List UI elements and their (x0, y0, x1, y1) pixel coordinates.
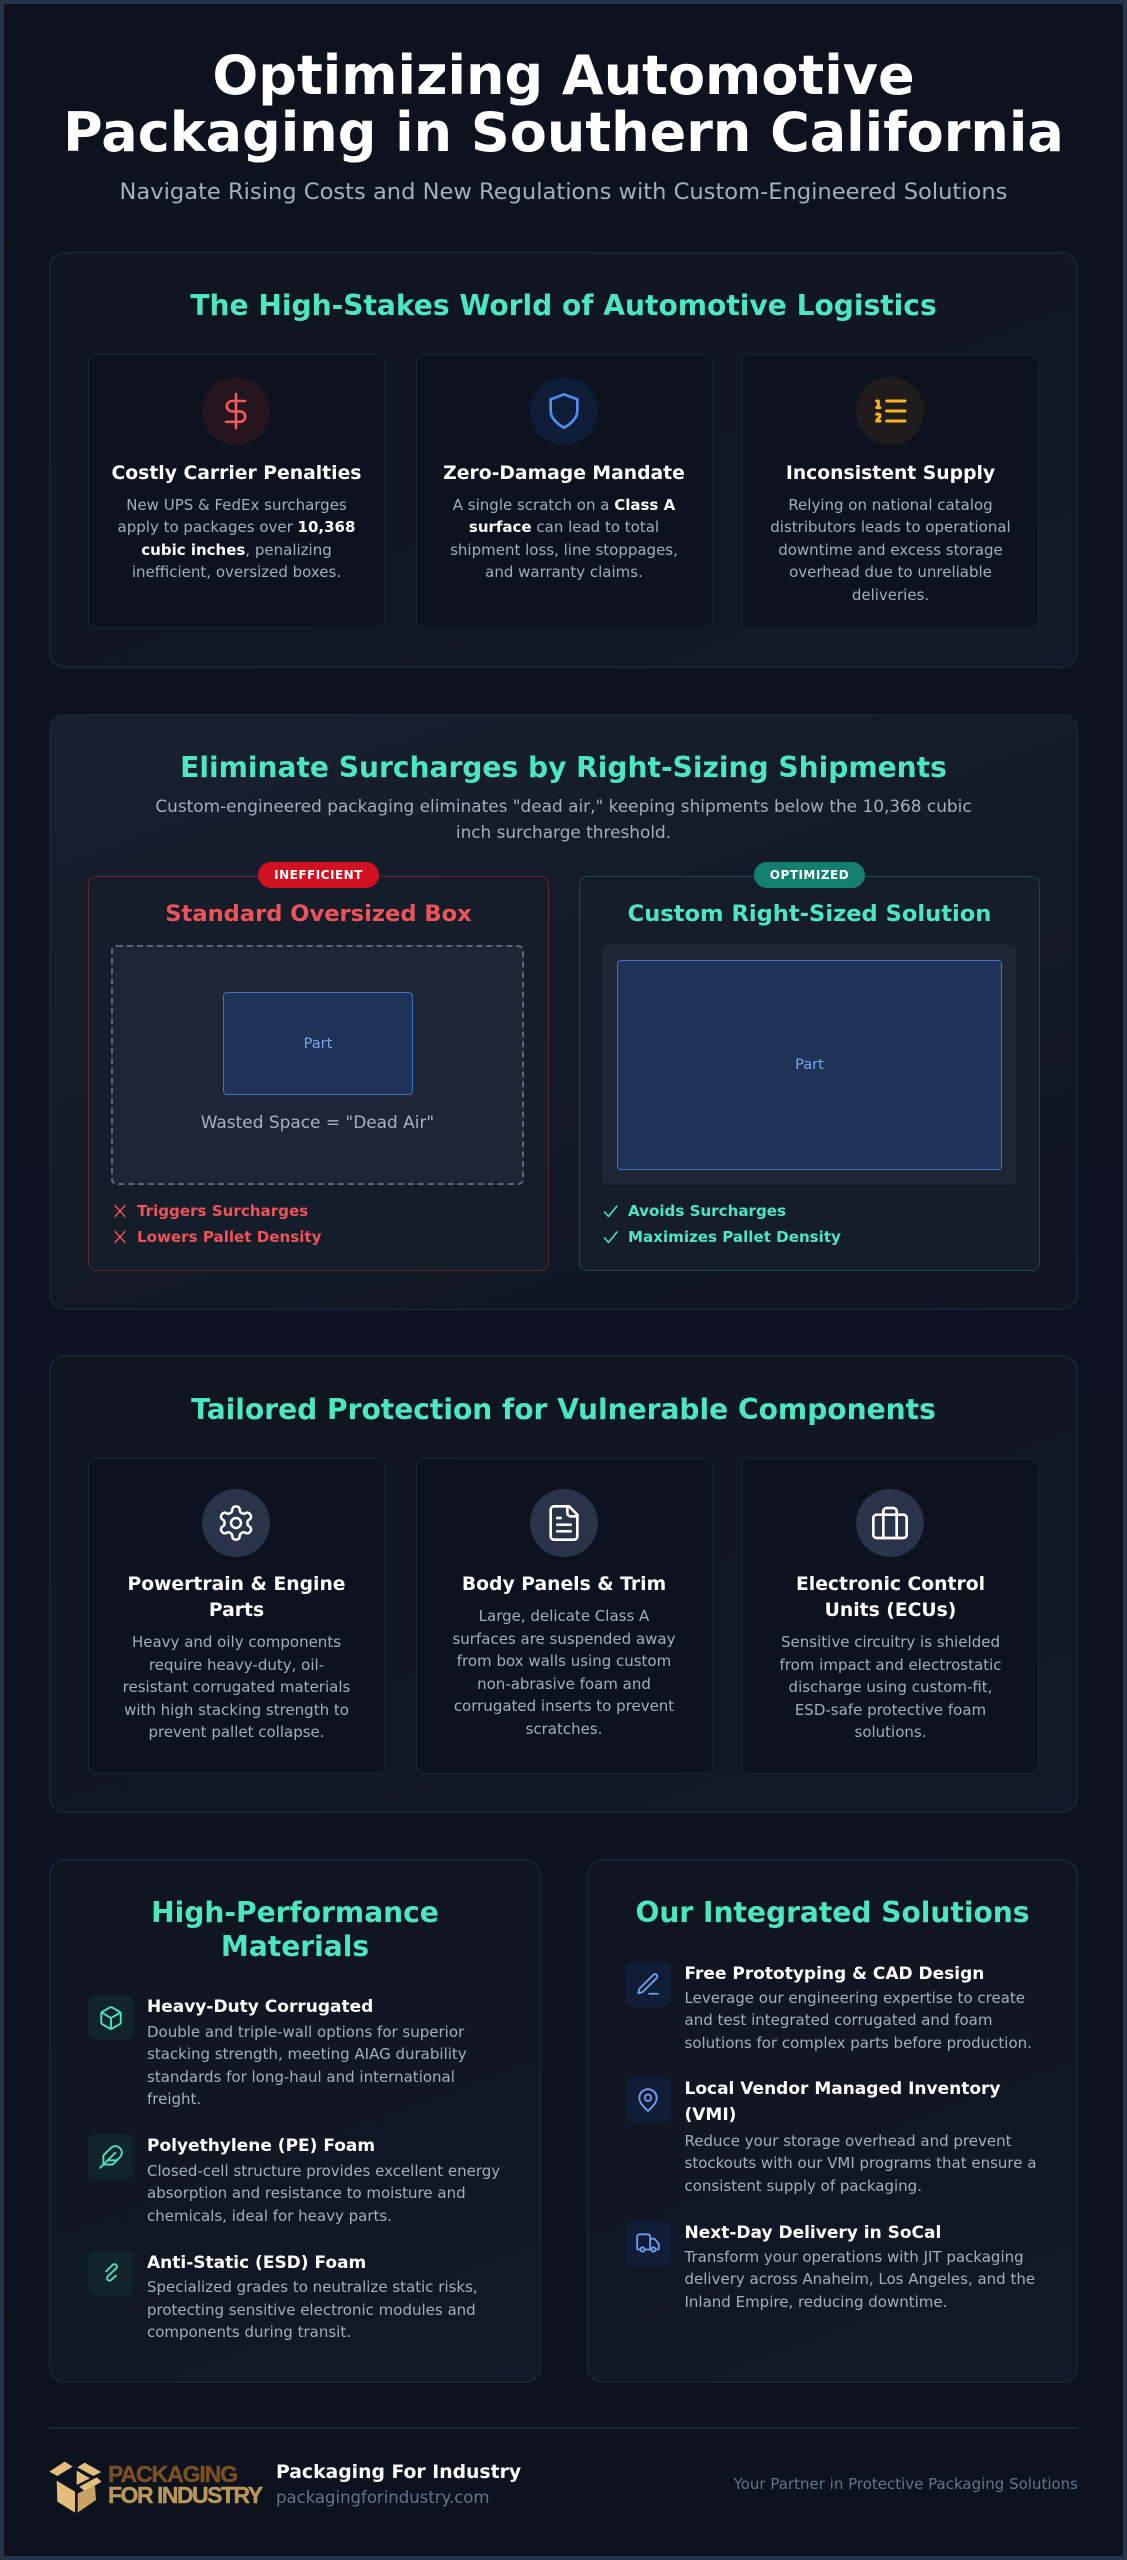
card text: apply to packages over 10,368 (118, 518, 355, 536)
card text: solutions. (854, 1723, 926, 1741)
badge: inefficient: INEFFICIENT (274, 868, 363, 882)
heading: protection: Tailored Protection for Vulnerable Components (191, 1393, 936, 1426)
item text: solutions for complex parts before production. (684, 2034, 1032, 2052)
item text: absorption and resistance to moisture and (147, 2184, 466, 2202)
heading: materials: High-Performance (151, 1896, 439, 1928)
card title: Powertrain & Engine (127, 1574, 346, 1595)
card text (118, 496, 355, 581)
panel: tailored protection (49, 1355, 1078, 1813)
icon: briefcase (856, 1489, 924, 1557)
card text: cubic inches, penalizing (141, 541, 332, 559)
card title: Parts (209, 1600, 264, 1621)
icon: map pin (626, 2077, 670, 2122)
heading: materials: Materials (221, 1930, 369, 1962)
card: costly carrier penalties (88, 354, 385, 629)
card text (123, 1633, 350, 1741)
item title (684, 2079, 1000, 2125)
item text: Leverage our engineering expertise to create (684, 1988, 1025, 2006)
footer company name: Packaging For Industry (276, 2462, 521, 2483)
title (63, 44, 1064, 164)
item text: freight. (147, 2090, 201, 2108)
item text (684, 1988, 1032, 2052)
material: corrugated (88, 1995, 467, 2108)
item text: Reduce your storage overhead and prevent (684, 2132, 1011, 2150)
item title: Free Prototyping & CAD Design (684, 1964, 984, 1984)
item text (147, 2162, 500, 2224)
card text: non-abrasive foam and (477, 1674, 651, 1692)
panel: high-stakes world (49, 252, 1078, 668)
icon: pen (626, 1962, 670, 2006)
item text (684, 2248, 1035, 2310)
item text: Closed-cell structure provides excellent energy (147, 2162, 500, 2180)
item text: stacking strength, meeting AIAG durability (147, 2045, 467, 2063)
item text: and test integrated corrugated and foam (684, 2011, 992, 2029)
list item: maximizes pallet density: Maximizes Pallet Density (628, 1228, 841, 1246)
card text (452, 1607, 676, 1738)
subtitle: Navigate Rising Costs and New Regulations with Custom-Engineered Solutions (120, 179, 1007, 205)
item text (147, 2022, 467, 2108)
card text: surfaces are suspended away (452, 1630, 676, 1648)
part: Part (795, 1056, 824, 1073)
card text (450, 496, 678, 581)
card text: Heavy and oily components (132, 1633, 341, 1651)
heading: surcharges: Eliminate Surcharges by Right-Sizing Shipments (180, 751, 947, 784)
item text: delivery across Anaheim, Los Angeles, and the (684, 2270, 1035, 2288)
logo (49, 2461, 263, 2513)
item text: Double and triple-wall options for superior (147, 2022, 464, 2040)
part (223, 992, 413, 1095)
item text: stockouts with our VMI programs that ensure a (684, 2154, 1036, 2172)
card: zero-damage mandate (416, 354, 712, 629)
heading: materials (151, 1896, 439, 1962)
diagram: right-sized box (602, 945, 1016, 1185)
card text: Relying on national catalog (788, 496, 993, 514)
section description: Custom-engineered packaging eliminates "dead air," keeping shipments below the 10,368 cubic (155, 796, 972, 816)
card text: with high stacking strength to (124, 1700, 349, 1718)
card text: and warranty claims. (485, 563, 643, 581)
icon: feather (88, 2134, 133, 2179)
logo wordmark: FOR INDUSTRY (108, 2482, 262, 2508)
card text: A single scratch on a Class A (453, 496, 675, 514)
card text: resistant corrugated materials (123, 1678, 350, 1696)
comparison card: right-sized solution (579, 876, 1040, 1271)
icon: link squiggle (88, 2250, 133, 2296)
part: Part (304, 1035, 332, 1052)
item title: Next-Day Delivery in SoCal (684, 2222, 941, 2242)
card: electronic control units (742, 1458, 1039, 1774)
panel: materials (49, 1859, 541, 2383)
footer url: packagingforindustry.com (276, 2488, 489, 2507)
title: Packaging in Southern California (63, 101, 1064, 164)
card text (779, 1633, 1002, 1741)
card text: from box walls using custom (457, 1652, 671, 1670)
item title: Heavy-Duty Corrugated (147, 1997, 373, 2017)
icon: shield (530, 377, 598, 445)
card text: shipment loss, line stoppages, (450, 541, 678, 559)
item text: standards for long-haul and international (147, 2068, 455, 2086)
solution: prototyping (626, 1962, 1032, 2052)
section description: inch surcharge threshold. (456, 822, 671, 842)
item title: Local Vendor Managed Inventory (684, 2079, 1000, 2099)
card: body panels (416, 1458, 712, 1774)
item text: consistent supply of packaging. (684, 2176, 922, 2194)
material: PE foam (88, 2134, 500, 2224)
diagram: box with dead air (111, 945, 524, 1185)
item text: chemicals, ideal for heavy parts. (147, 2206, 392, 2224)
card title: Electronic Control (796, 1574, 985, 1595)
logo wordmark (108, 2461, 263, 2508)
item text: Transform your operations with JIT packaging (684, 2248, 1024, 2266)
icon: box (88, 1995, 133, 2040)
material: ESD foam (88, 2251, 478, 2341)
list item: triggers surcharges: Triggers Surcharges (137, 1202, 308, 1220)
badge: optimized: OPTIMIZED (770, 868, 849, 882)
card text: corrugated inserts to prevent (454, 1697, 674, 1715)
card text: Sensitive circuitry is shielded (781, 1633, 1000, 1651)
item title: Anti-Static (ESD) Foam (147, 2252, 366, 2272)
card text: New UPS & FedEx surcharges (126, 496, 347, 514)
card text: scratches. (526, 1720, 602, 1738)
icon: truck (626, 2220, 670, 2266)
card text: downtime and excess storage (778, 541, 1003, 559)
card title: Costly Carrier Penalties (112, 462, 361, 484)
card text: discharge using custom-fit, (789, 1678, 992, 1696)
item text (147, 2278, 478, 2341)
comparison title: Standard Oversized Box (165, 901, 472, 927)
item text (684, 2132, 1036, 2194)
panel: eliminate surcharges (49, 714, 1078, 1310)
card text: distributors leads to operational (770, 518, 1011, 536)
panel: integrated solutions (587, 1859, 1078, 2383)
icon: dollar sign (202, 377, 270, 445)
item text: Inland Empire, reducing downtime. (684, 2292, 947, 2310)
card title: Inconsistent Supply (786, 462, 995, 484)
comparison card: oversized box (88, 876, 549, 1271)
card text: ESD-safe protective foam (795, 1700, 986, 1718)
card: inconsistent supply (742, 354, 1039, 629)
card text: deliveries. (852, 586, 929, 604)
card title (127, 1574, 346, 1621)
card title: Body Panels & Trim (462, 1574, 666, 1595)
badge: optimized (754, 862, 865, 888)
card text: overhead due to unreliable (789, 563, 992, 581)
icon: gear (202, 1489, 270, 1557)
list item: avoids surcharges: Avoids Surcharges (628, 1202, 786, 1220)
card text: inefficient, oversized boxes. (132, 563, 341, 581)
heading: solutions: Our Integrated Solutions (636, 1896, 1030, 1928)
item text: components during transit. (147, 2323, 351, 2341)
title: Optimizing Automotive (212, 44, 915, 107)
heading: high-stakes: The High-Stakes World of Automotive Logistics (190, 289, 937, 322)
icon: document (530, 1489, 598, 1557)
solution: VMI (626, 2077, 1036, 2194)
item text: protecting sensitive electronic modules and (147, 2300, 476, 2318)
comparison title: Custom Right-Sized Solution (628, 901, 991, 927)
item title: (VMI) (684, 2105, 736, 2125)
part (617, 960, 1002, 1170)
card text: from impact and electrostatic (779, 1656, 1002, 1674)
dead air label: Wasted Space = "Dead Air" (201, 1112, 434, 1132)
card title (796, 1574, 985, 1621)
item title: Polyethylene (PE) Foam (147, 2136, 375, 2156)
logo icon: box (49, 2462, 102, 2513)
list item: lowers pallet density: Lowers Pallet Density (137, 1228, 321, 1246)
badge: inefficient (258, 862, 379, 888)
card title: Zero-Damage Mandate (443, 462, 685, 484)
card text: require heavy-duty, oil- (149, 1656, 324, 1674)
solution: delivery (626, 2221, 1035, 2310)
card title: Units (ECUs) (825, 1600, 956, 1621)
icon: ordered list (856, 377, 924, 445)
footer tagline: Your Partner in Protective Packaging Solutions (734, 2475, 1078, 2493)
card text: surface can lead to total (469, 518, 659, 536)
card text (770, 496, 1011, 604)
card text: Large, delicate Class A (479, 1607, 649, 1625)
card text: prevent pallet collapse. (148, 1723, 325, 1741)
card: powertrain (88, 1458, 385, 1774)
logo wordmark: PACKAGING (108, 2461, 237, 2487)
section description (155, 796, 972, 842)
item text: Specialized grades to neutralize static risks, (147, 2278, 478, 2296)
footer (49, 2461, 1078, 2513)
